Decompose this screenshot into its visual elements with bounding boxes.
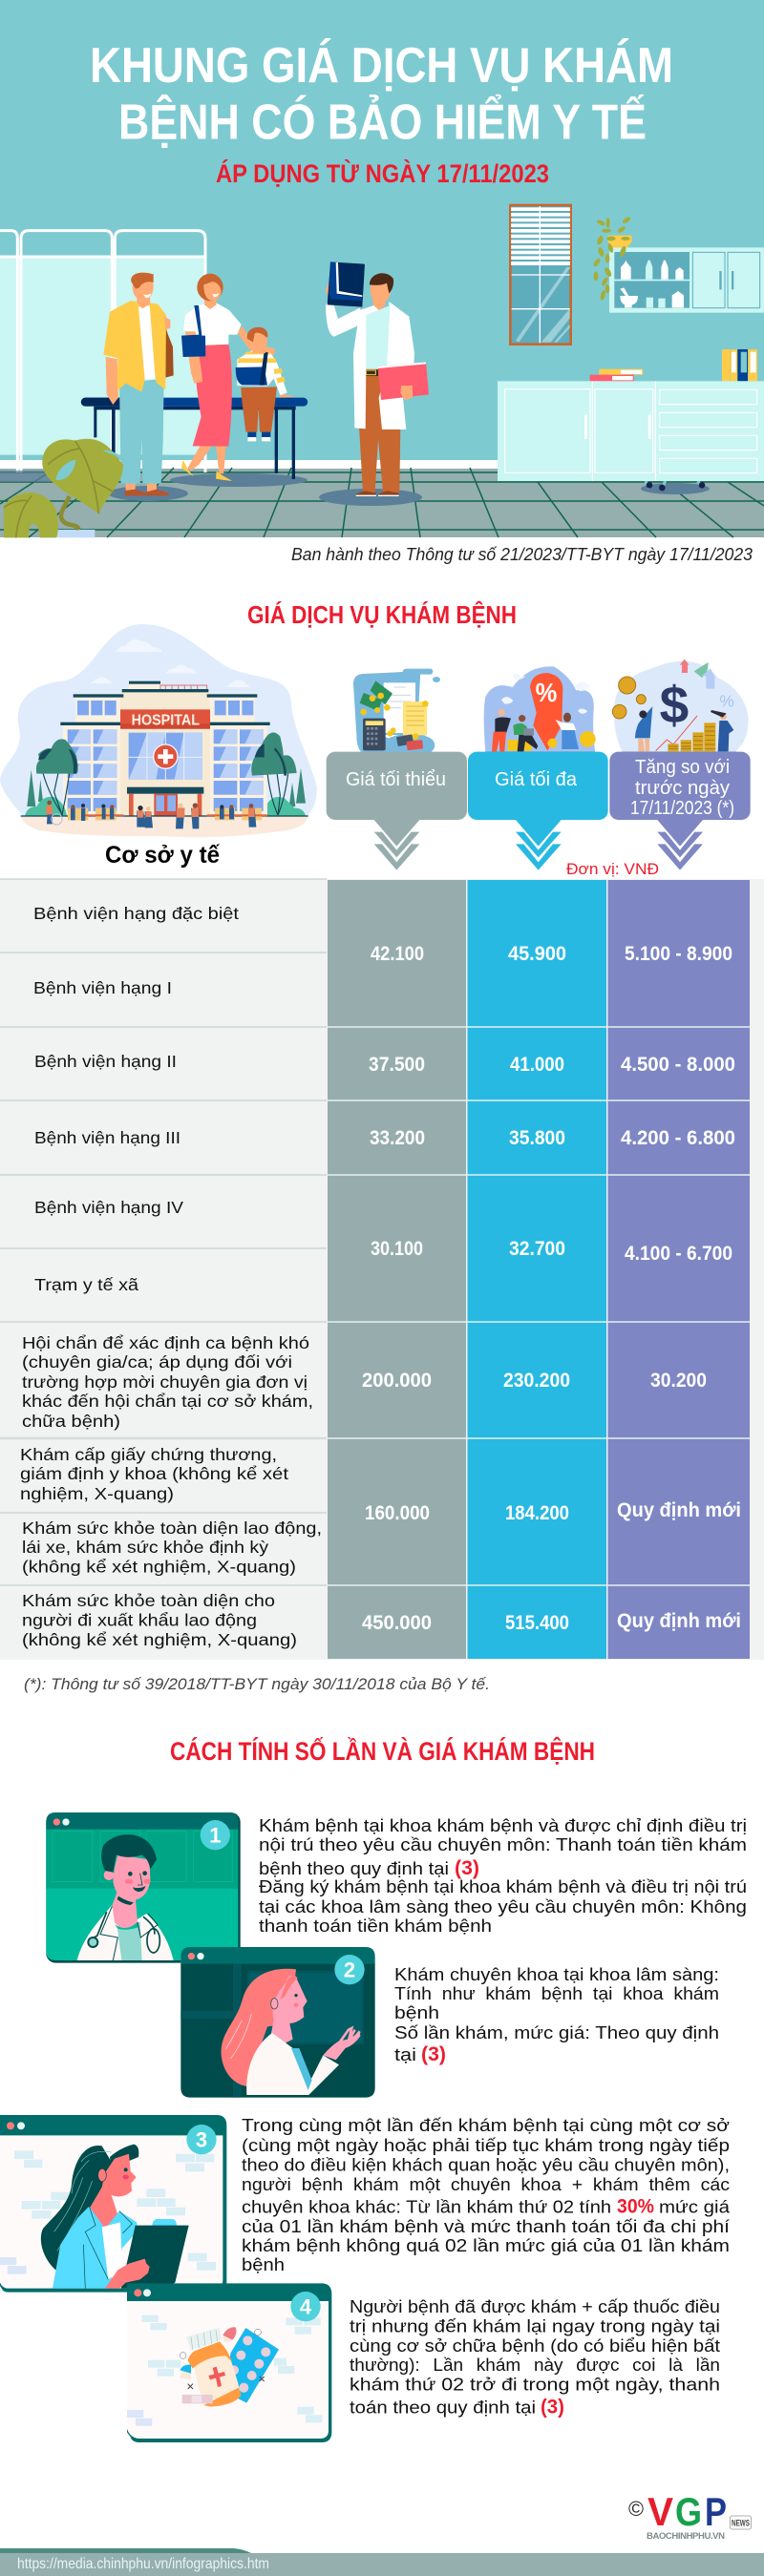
text block: case 2: Khám chuyên khoa tại khoa lâm sàng: — [394, 1965, 719, 1984]
text block: case 4 — [350, 2297, 720, 2419]
row: special class and class I hospitals: 5.100 - 8.900 — [625, 943, 732, 965]
legal source line: Ban hành theo Thông tư số 21/2023/TT-BYT ngày 17/11/2023 — [291, 545, 753, 564]
subtitle: effective date: ÁP DỤNG TỪ NGÀY 17/11/2023 — [216, 158, 549, 188]
row: injury certificates and comprehensive health checks: giám định y khoa (không kể xét — [20, 1464, 288, 1483]
badge 1 — [201, 1820, 230, 1850]
row: class II hospital: Bệnh viện hạng II — [34, 1052, 177, 1071]
child with arm sling — [236, 327, 295, 441]
row: special class and class I hospitals: Bệnh viện hạng I — [33, 978, 172, 997]
logo: VGP News: © — [628, 2497, 644, 2521]
row: class III hospital — [34, 1127, 735, 1149]
header label: minimum: Giá tối thiểu — [346, 769, 446, 790]
row: injury certificates and comprehensive health checks: Quy định mới — [617, 1499, 741, 1521]
hospital sign — [120, 709, 210, 729]
header label: increase compared to before: 17/11/2023 (*) — [630, 798, 734, 819]
row: injury certificates and comprehensive health checks — [20, 1445, 741, 1577]
text block: case 1 — [259, 1816, 747, 1936]
text block: case 2: Số lần khám, mức giá: Theo quy định — [394, 2023, 719, 2042]
badge 3 — [186, 2125, 217, 2154]
heading: how to count visits: CÁCH TÍNH SỐ LẦN VÀ GIÁ KHÁM BỆNH — [170, 1735, 595, 1766]
room furniture: window, shelves, cabinet — [498, 205, 764, 491]
header label: increase compared to before: trước ngày — [635, 778, 730, 799]
label: facilities column: Cơ sở y tế — [105, 842, 220, 869]
row: class IV hospital and commune health station — [34, 1198, 732, 1294]
text block: case 3: theo do điều kiện khách quan hoặc yêu cầu chuyên môn), — [242, 2155, 730, 2174]
column headers — [327, 660, 751, 870]
title: BỆNH CÓ BẢO HIỂM Y TẾ — [118, 94, 647, 151]
badge 4 — [290, 2292, 321, 2321]
people, bench and plant — [4, 262, 429, 537]
logo: VGP News: BAOCHINHPHU.VN — [647, 2531, 725, 2542]
text block: case 4: thường): Lần khám này được coi là lần — [350, 2356, 720, 2375]
text block: case 3: 30% — [617, 2195, 654, 2218]
row: injury certificates and comprehensive health checks: Khám cấp giấy chứng thương, — [20, 1445, 277, 1464]
badge 2: 2 — [344, 1958, 355, 1982]
text block: case 1: tại các khoa lâm sàng theo yêu cầu chuyên môn: Không — [259, 1897, 747, 1916]
card 1: doctor — [46, 1812, 241, 1963]
text block: case 2: tại — [394, 2045, 416, 2064]
row: health check for labour export — [22, 1591, 741, 1649]
logo: VGP News: NEWS — [732, 2518, 750, 2527]
icon: money and calculator — [353, 669, 440, 755]
books on cabinet — [590, 349, 757, 381]
title: KHUNG GIÁ DỊCH VỤ KHÁM — [90, 38, 673, 94]
row: specialist consultation: (chuyên gia/ca; áp dụng đối với — [22, 1352, 292, 1372]
badge 2 — [334, 1955, 365, 1984]
row: class II hospital: 4.500 - 8.000 — [621, 1054, 735, 1076]
man in yellow shirt — [103, 273, 174, 495]
text block: case 3: Trong cùng một lần đến khám bệnh tại cùng một cơ sở — [242, 2116, 730, 2135]
row: class IV hospital and commune health station: Trạm y tế xã — [34, 1275, 138, 1294]
text block: case 4: toán theo quy định tại — [350, 2398, 536, 2417]
icon: percent tag with people: % — [536, 678, 557, 707]
hanging plant — [592, 216, 632, 301]
text block: case 3: người bệnh khám một chuyên khoa + khám thêm các — [242, 2175, 730, 2194]
row: health check for labour export: 515.400 — [505, 1612, 569, 1634]
text block: case 3 — [242, 2116, 731, 2274]
row: special class and class I hospitals: 45.900 — [508, 943, 566, 965]
header box: increase — [609, 752, 751, 870]
wall shelves — [609, 247, 764, 313]
illustration: hospital — [0, 624, 317, 837]
hospital sign: HOSPITAL — [132, 712, 200, 728]
row: health check for labour export: Quy định mới — [617, 1610, 741, 1632]
row: health check for labour export: 450.000 — [362, 1612, 432, 1634]
heading: service prices: GIÁ DỊCH VỤ KHÁM BỆNH — [247, 600, 517, 629]
row: specialist consultation: 30.200 — [650, 1370, 707, 1392]
text block: case 4: khám thứ 02 trở đi trong một ngày, thanh — [350, 2375, 720, 2394]
row: injury certificates and comprehensive health checks: 184.200 — [505, 1502, 569, 1524]
text block: case 1: thanh toán tiền khám bệnh — [259, 1916, 492, 1936]
card 2: woman — [180, 1947, 375, 2098]
text block: case 4: cùng cơ sở chữa bệnh (do có biểu hiện bất — [350, 2336, 720, 2356]
footer bar — [0, 2548, 764, 2576]
icon: dollar sign and coins: % — [719, 692, 734, 711]
row: specialist consultation: 200.000 — [362, 1370, 432, 1392]
text block: case 3: khám bệnh không quá 02 lần mức giá của 01 lần khám — [242, 2236, 730, 2255]
row: class III hospital: 4.200 - 6.800 — [621, 1127, 735, 1149]
bench — [81, 398, 308, 479]
text block: case 1: nội trú theo yêu cầu chuyên môn: Thanh toán tiền khám — [259, 1835, 747, 1854]
table: price table — [0, 879, 764, 1660]
badge 4: 4 — [300, 2295, 312, 2319]
row: injury certificates and comprehensive health checks: nghiệm, X-quang) — [20, 1484, 174, 1503]
panel: hero illustration — [0, 0, 764, 537]
header label: increase compared to before: Tăng so với — [635, 757, 730, 778]
source URL: https://media.chinhphu.vn/infographics.htm — [17, 2556, 269, 2572]
text block: case 4: (3) — [541, 2396, 564, 2419]
doctor holding x-ray — [326, 262, 429, 496]
text block: case 4: Người bệnh đã được khám + cấp thuốc điều — [350, 2297, 720, 2316]
text block: case 3: chuyên khoa khác: Từ lần khám thứ 02 tính — [242, 2197, 611, 2216]
row: class IV hospital and commune health station: 4.100 - 6.700 — [625, 1243, 732, 1265]
icon: percent tag with people — [484, 666, 596, 753]
text block: case 2 — [394, 1965, 719, 2065]
icon: dollar sign and coins: $ — [660, 675, 689, 734]
row: class III hospital: 35.800 — [509, 1127, 565, 1149]
row: special class and class I hospitals: 42.100 — [371, 943, 424, 965]
row: class II hospital: 37.500 — [369, 1054, 425, 1076]
header label: maximum: Giá tối đa — [495, 769, 578, 790]
row: class II hospital: 41.000 — [510, 1054, 564, 1076]
row: health check for labour export: Khám sức khỏe toàn diện cho — [22, 1591, 275, 1610]
icon: dollar sign and coins — [612, 660, 748, 753]
text block: case 2: (3) — [421, 2043, 446, 2065]
potted plant — [4, 439, 123, 537]
shadows on the floor — [0, 471, 710, 506]
row: specialist consultation: trường hợp mời chuyên gia đơn vị — [22, 1372, 308, 1392]
row: class III hospital: Bệnh viện hạng III — [34, 1128, 180, 1147]
text block: case 3: bệnh — [242, 2255, 285, 2274]
trees — [25, 732, 306, 816]
row: health check for labour export: người đi xuất khẩu lao động — [22, 1611, 257, 1630]
row: class IV hospital and commune health station: Bệnh viện hạng IV — [34, 1198, 183, 1217]
folding screen — [0, 231, 205, 472]
header box: minimum price — [327, 752, 467, 870]
title — [90, 38, 673, 151]
header label: increase compared to before — [630, 757, 734, 819]
row: special class and class I hospitals — [33, 904, 732, 997]
row: class III hospital: 33.200 — [370, 1127, 425, 1149]
row: specialist consultation: 230.200 — [503, 1370, 570, 1392]
badge 3: 3 — [196, 2128, 207, 2152]
row: health check for labour export: (không kể xét nghiệm, X-quang) — [22, 1630, 297, 1649]
header box: maximum price — [468, 752, 608, 870]
text block: case 2: bệnh — [394, 2003, 439, 2022]
text block: case 1: (3) — [455, 1857, 479, 1879]
text block: case 1: Khám bệnh tại khoa khám bệnh và được chỉ định điều trị — [259, 1816, 747, 1835]
row: specialist consultation — [22, 1333, 707, 1431]
window with blinds — [510, 205, 571, 345]
card 3: woman with clipboard — [0, 2115, 226, 2293]
row: injury certificates and comprehensive health checks: (không kể xét nghiệm, X-quang) — [22, 1558, 296, 1577]
woman in pink skirt — [181, 274, 275, 481]
text block: case 1: Đăng ký khám bệnh tại khoa khám bệnh và điều trị nội trú — [259, 1877, 747, 1896]
cards 1 and 2 illustrations — [46, 1812, 375, 2098]
footnote: (*): Thông tư số 39/2018/TT-BYT ngày 30/11/2018 của Bộ Y tế. — [24, 1675, 490, 1693]
badge 1: 1 — [209, 1824, 221, 1848]
row: specialist consultation: khác đến hội chẩn tại cơ sở khám, — [22, 1392, 313, 1411]
logo: VGP News: V — [647, 2489, 673, 2534]
row: injury certificates and comprehensive health checks: Khám sức khỏe toàn diện lao động, — [22, 1518, 322, 1538]
logo: VGP News — [628, 2489, 751, 2542]
text block: case 3: (cùng một ngày hoặc phải tiếp tục khám trong ngày tiếp — [242, 2136, 730, 2155]
logo: VGP News: G — [675, 2489, 702, 2534]
cards 3 and 4 illustrations — [0, 2115, 331, 2442]
row: class IV hospital and commune health station: 30.100 — [371, 1238, 423, 1260]
floor tile grid — [0, 468, 764, 537]
medical cabinet — [498, 381, 764, 491]
row: specialist consultation: Hội chẩn để xác định ca bệnh khó — [22, 1333, 309, 1352]
text block: case 3: mức giá — [659, 2197, 731, 2216]
row: injury certificates and comprehensive health checks: 160.000 — [365, 1502, 430, 1524]
visitors — [46, 801, 267, 828]
text block: case 3: của 01 lần khám bệnh và mức thanh toán tối đa chi phí — [242, 2217, 730, 2236]
text block: case 1: bệnh theo quy định tại — [259, 1859, 449, 1878]
row: special class and class I hospitals: Bệnh viện hạng đặc biệt — [33, 904, 239, 923]
unit note: Đơn vị: VNĐ — [566, 860, 659, 878]
text block: case 4: trị nhưng đến khám lại ngay trong ngày tại — [350, 2317, 720, 2336]
logo: VGP News: P — [705, 2489, 727, 2534]
row: class IV hospital and commune health station: 32.700 — [509, 1238, 565, 1260]
text block: case 2: Tính như khám bệnh tại khoa khám — [394, 1984, 719, 2003]
row: injury certificates and comprehensive health checks: lái xe, khám sức khỏe định kỳ — [22, 1538, 268, 1557]
card 4: medicine — [127, 2283, 331, 2442]
row: class II hospital — [34, 1052, 735, 1076]
row: specialist consultation: chữa bệnh) — [22, 1412, 120, 1431]
